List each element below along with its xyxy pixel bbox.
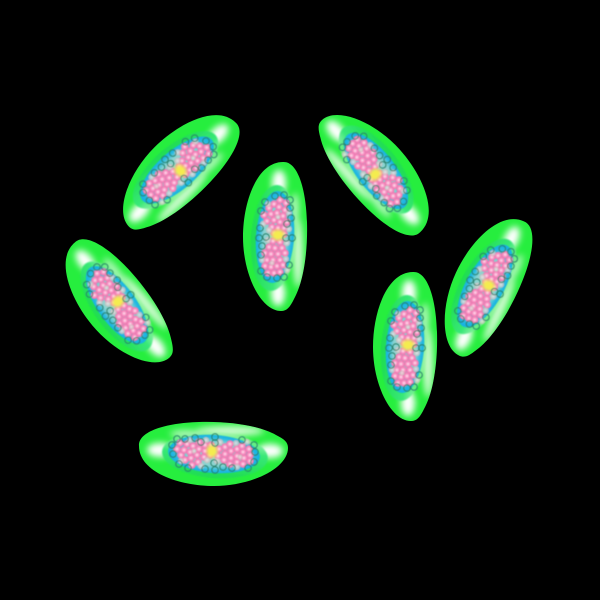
illustration: group of seven crescent cells xyxy=(66,115,532,486)
cell: far right xyxy=(425,204,546,367)
cell: upper centre xyxy=(243,162,307,311)
cell: bottom horizontal xyxy=(139,422,288,486)
cell: middle left xyxy=(44,227,189,382)
cell: lower centre right xyxy=(373,272,437,421)
cell: upper left xyxy=(102,94,253,245)
cell: upper right xyxy=(303,95,450,248)
